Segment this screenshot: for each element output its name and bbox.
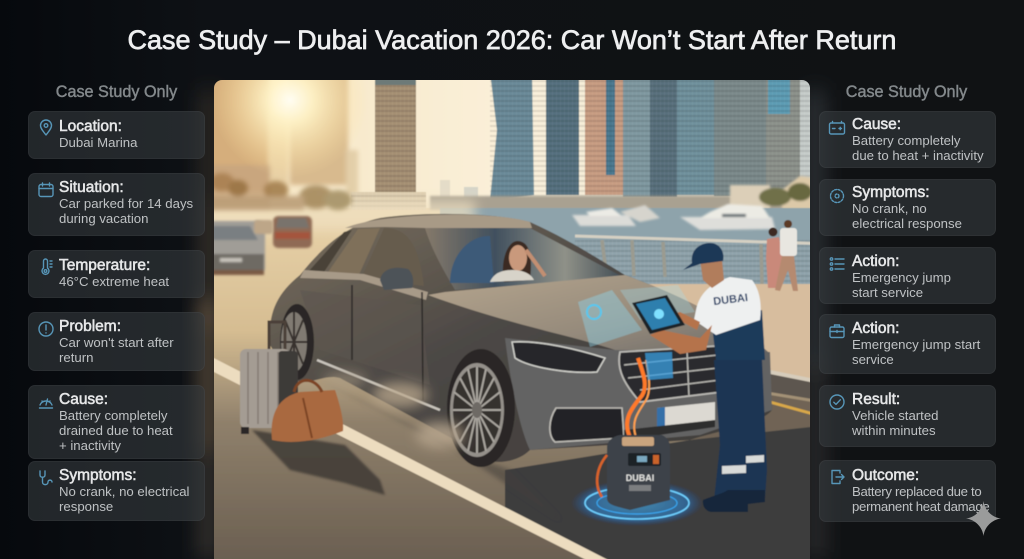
- cause text: Battery completely: [59, 408, 167, 423]
- temperature text: 46°C extreme heat: [59, 274, 169, 289]
- location text: Dubai Marina: [59, 135, 137, 150]
- icon: alert circle: [38, 321, 54, 337]
- action service text: Emergency jump start: [852, 337, 980, 352]
- action text: start service: [852, 285, 923, 300]
- cause text: Cause:: [59, 391, 108, 408]
- blue energy rings: [571, 480, 703, 526]
- suitcase: [240, 322, 298, 434]
- symptoms text: Symptoms:: [59, 467, 137, 484]
- icon: map pin: [40, 119, 52, 136]
- front wheel: [447, 349, 515, 467]
- card: location: [28, 111, 205, 159]
- dust cloud: [323, 372, 464, 448]
- palm trees: [205, 173, 352, 210]
- skyline left warm towers: [214, 80, 360, 200]
- icon: check circle: [829, 394, 845, 410]
- icon: checklist: [830, 257, 845, 271]
- mirror: [380, 268, 413, 290]
- hood: [428, 275, 768, 352]
- card: action jump start: [819, 247, 996, 304]
- right panel heading: Case Study Only: [846, 83, 967, 101]
- rear wheel: [280, 304, 314, 380]
- cause text: + inactivity: [59, 438, 121, 453]
- action text: Emergency jump: [852, 270, 951, 285]
- tablet: [632, 295, 685, 334]
- road shadow under car and right road: [504, 426, 810, 559]
- card: problem: [28, 312, 205, 371]
- problem text: Car won't start after: [59, 335, 174, 350]
- cause text: drained due to heat: [59, 423, 173, 438]
- headlight: [512, 342, 605, 372]
- number plate: [657, 402, 715, 428]
- sun glare: [221, 80, 354, 166]
- cause text: [59, 391, 173, 453]
- right edge glow: [806, 90, 826, 559]
- temperature text: Temperature:: [59, 257, 150, 274]
- card: right cause: [819, 111, 996, 168]
- problem text: return: [59, 350, 93, 365]
- right symptoms text: Symptoms:: [852, 184, 930, 201]
- forearm upper: [670, 312, 700, 330]
- location text: Location:: [59, 118, 122, 135]
- trousers: [714, 360, 767, 500]
- kerb: [770, 370, 810, 416]
- car body: [270, 214, 772, 462]
- front bumper: [505, 338, 772, 450]
- result text: Result:: [852, 391, 900, 408]
- situation text: Situation:: [59, 179, 124, 196]
- situation text: Car parked for 14 days: [59, 196, 193, 211]
- windshield: [425, 228, 625, 290]
- vest: [712, 310, 765, 360]
- jump starter box: DUBAI: [626, 473, 654, 483]
- icon: gauge: [38, 398, 54, 409]
- white lane line: [200, 351, 620, 559]
- card: cause: [28, 385, 205, 459]
- forearm: [650, 325, 712, 354]
- card: situation: [28, 173, 205, 236]
- shirt: [694, 277, 761, 335]
- result text: within minutes: [852, 423, 936, 438]
- seat: [450, 236, 494, 283]
- situation text: during vacation: [59, 211, 148, 226]
- couple walking: [766, 220, 798, 291]
- uniform lettering: DUBAI: [713, 292, 749, 308]
- icon: battery: [828, 120, 846, 135]
- road surface: [200, 208, 830, 559]
- promenade: [763, 311, 810, 378]
- holographic overlays: [578, 285, 695, 347]
- right cause text: Cause:: [852, 116, 901, 133]
- card: action service: [819, 314, 996, 374]
- door seam: [352, 285, 423, 400]
- sparkle watermark: [966, 501, 1001, 536]
- rear side windows: [300, 228, 428, 300]
- grille: [619, 346, 722, 402]
- central scene illustration: [214, 80, 810, 559]
- card: symptoms: [28, 461, 205, 521]
- roof: [345, 215, 532, 228]
- sill chrome: [317, 360, 440, 410]
- electric cable: [627, 352, 673, 437]
- result text: [852, 391, 939, 438]
- temperature text: [59, 257, 169, 289]
- outcome text: Battery replaced due to: [852, 484, 981, 499]
- icon: toolbox: [829, 324, 845, 338]
- symptoms text: [59, 467, 189, 514]
- driver woman: [490, 241, 545, 282]
- card: result: [819, 385, 996, 447]
- sedan car: [270, 214, 772, 467]
- location text: [59, 118, 138, 150]
- result text: Vehicle started: [852, 408, 939, 423]
- boots: [703, 490, 765, 512]
- icon: gear: [830, 188, 844, 204]
- right cause text: Battery completely: [852, 133, 960, 148]
- right cause text: due to heat + inactivity: [852, 148, 984, 163]
- action text: Action:: [852, 253, 899, 270]
- right symptoms text: [852, 184, 962, 231]
- action service text: Action:: [852, 320, 899, 337]
- outcome text: permanent heat damage: [852, 499, 989, 514]
- left panel heading: Case Study Only: [56, 83, 177, 101]
- door panel highlight: [383, 348, 429, 383]
- problem text: Problem:: [59, 318, 121, 335]
- sky: [268, 80, 782, 208]
- icon: exit arrow: [831, 470, 845, 484]
- haze over road: [205, 200, 475, 230]
- yachts: [572, 204, 775, 230]
- card: outcome: [819, 460, 996, 522]
- reflective stripes: [722, 465, 746, 474]
- leather duffel bag: [272, 380, 343, 442]
- icon: thermometer: [41, 258, 53, 276]
- lower air intake: [550, 408, 624, 442]
- railing: [575, 236, 830, 284]
- cap: [683, 243, 723, 270]
- jump starter box: [597, 435, 670, 510]
- title: Case Study – Dubai Vacation 2026: Car Won’t Start After Return: [128, 25, 896, 55]
- icon: calendar: [38, 182, 54, 198]
- left edge glow: [198, 90, 218, 559]
- situation text: [59, 179, 193, 226]
- symptoms text: response: [59, 499, 113, 514]
- skyline mid tower: [351, 72, 426, 210]
- action text: [852, 253, 951, 300]
- water: [440, 208, 830, 248]
- card: temperature: [28, 250, 205, 298]
- right cause text: [852, 116, 984, 163]
- outcome text: [852, 467, 990, 514]
- symptoms text: No crank, no electrical: [59, 484, 189, 499]
- card: right symptoms: [819, 179, 996, 236]
- technician: [650, 243, 767, 512]
- action service text: service: [852, 352, 894, 367]
- outcome text: Outcome:: [852, 467, 919, 484]
- distant cars: [205, 216, 312, 275]
- icon: stethoscope: [39, 470, 53, 486]
- right symptoms text: electrical response: [852, 216, 962, 231]
- skyline right towers: [440, 80, 810, 198]
- right symptoms text: No crank, no: [852, 201, 927, 216]
- action service text: [852, 320, 980, 367]
- problem text: [59, 318, 174, 365]
- marina quay buildings: [428, 175, 810, 210]
- face: [700, 260, 724, 288]
